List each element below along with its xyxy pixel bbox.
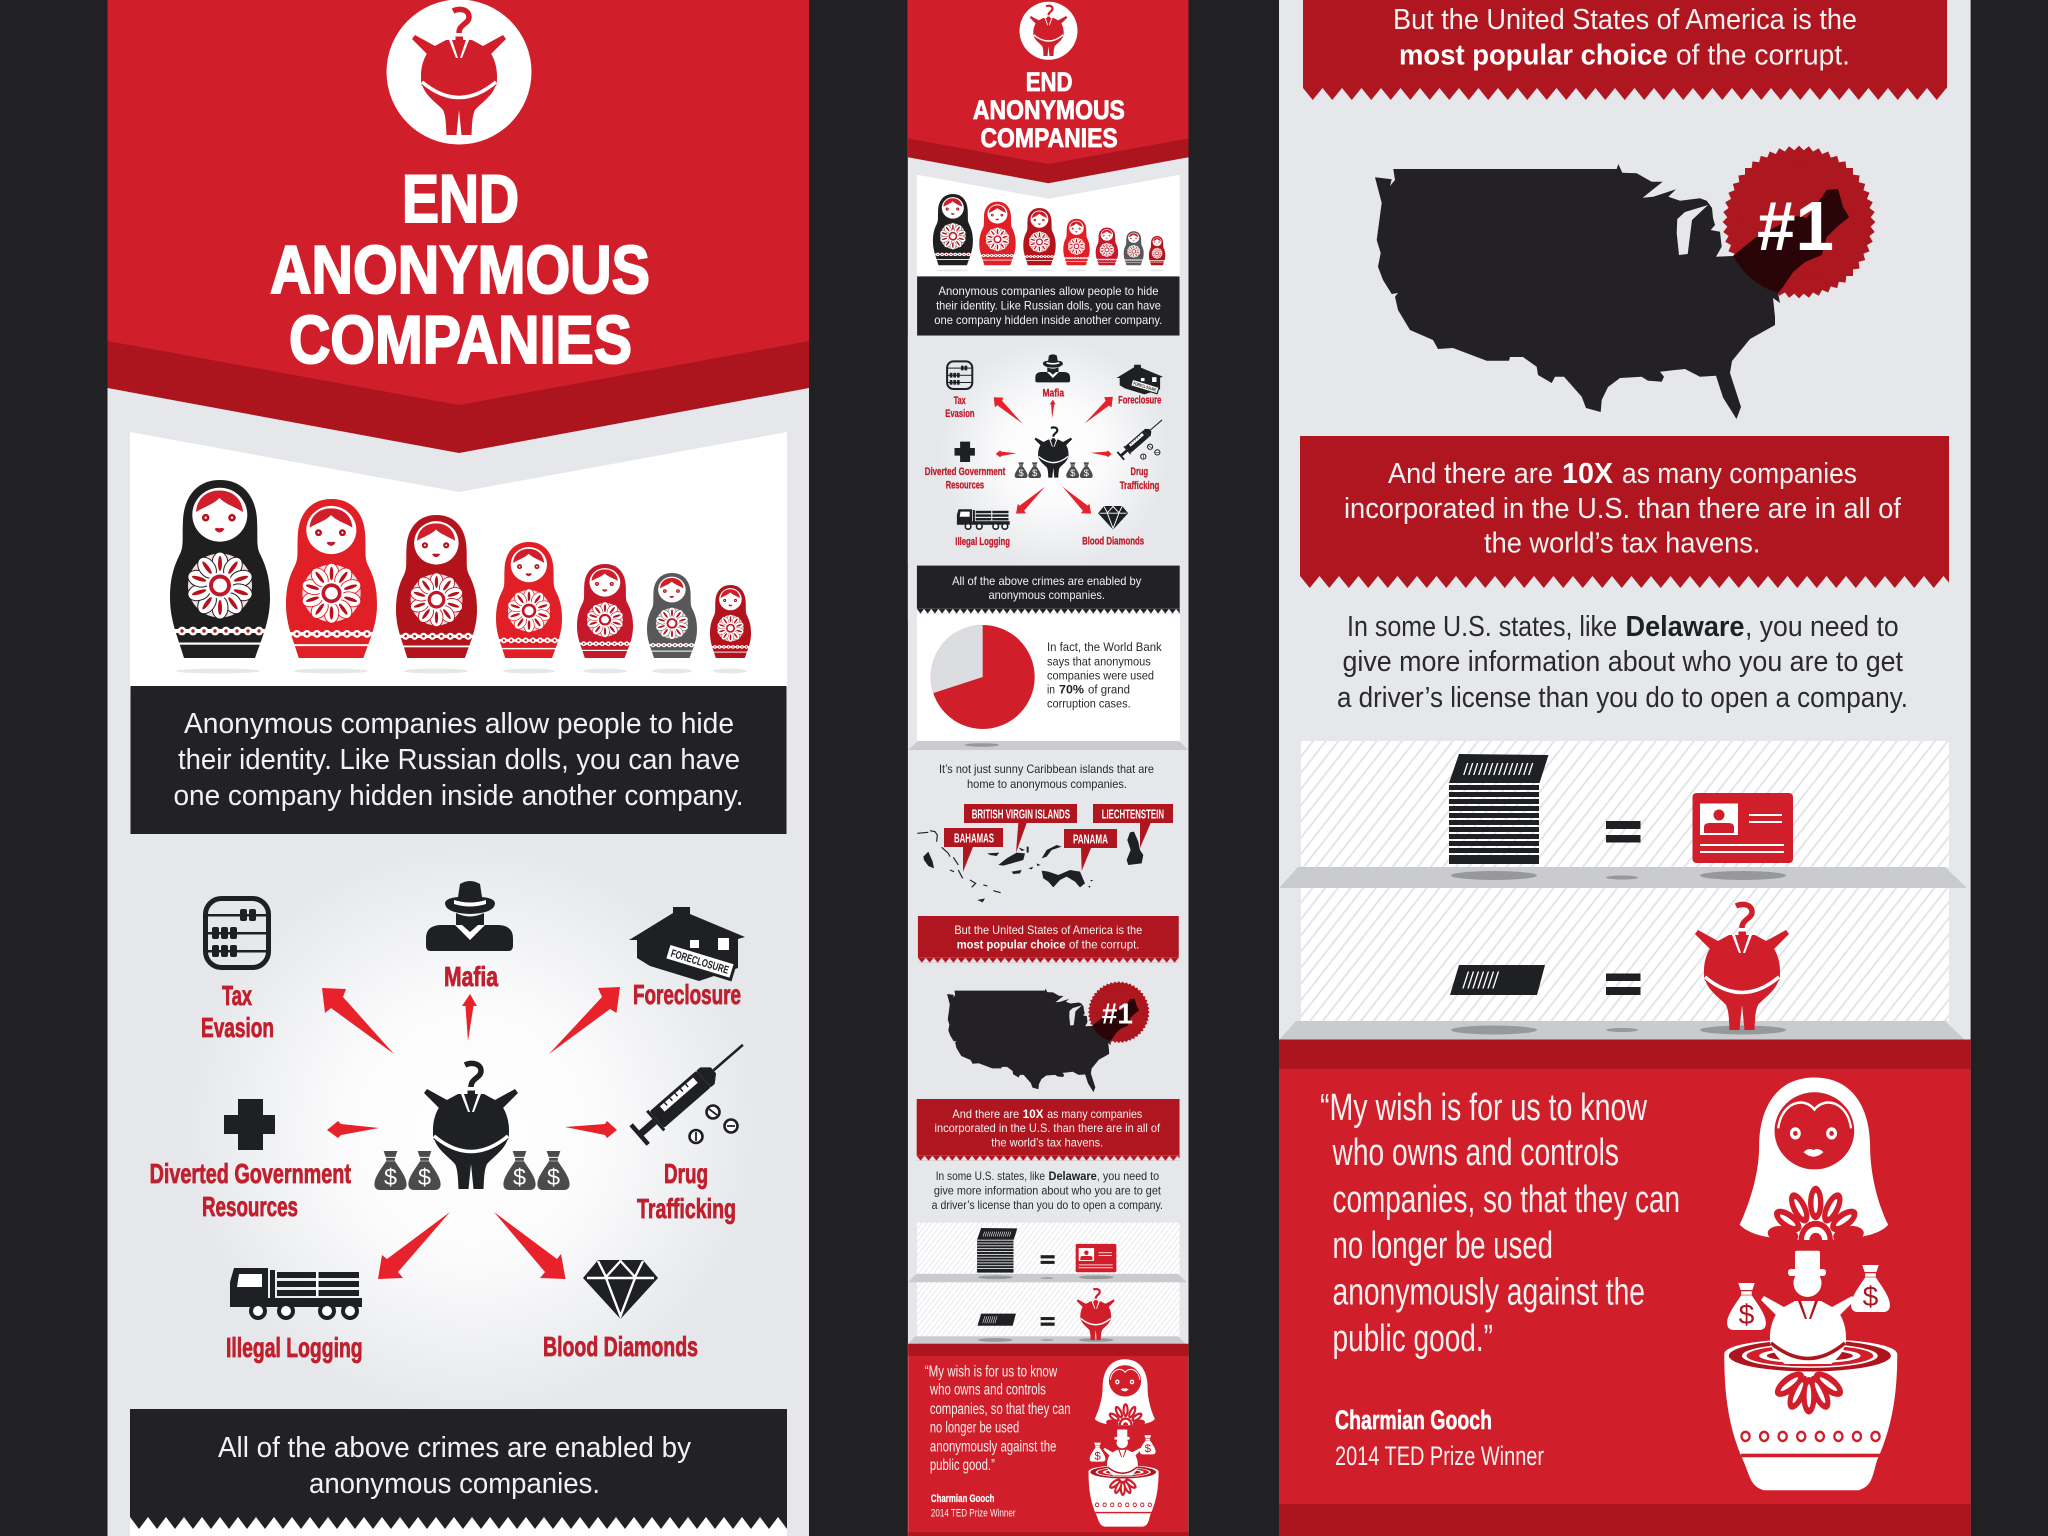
crime labels: Diverted Government bbox=[150, 1158, 351, 1189]
panel: right column background bbox=[1279, 0, 1971, 1536]
quote text: public good.” bbox=[1332, 1318, 1493, 1360]
icon: red anonymous man bbox=[1695, 904, 1789, 1030]
illustration: opened doll revealing man with money bbox=[1724, 1078, 1897, 1490]
crime labels small: Foreclosure bbox=[1118, 395, 1161, 407]
10X text small: 10X bbox=[1023, 1108, 1044, 1121]
text block: Caribbean islands: home to anonymous companies. bbox=[967, 777, 1127, 791]
intro text small bbox=[934, 285, 1162, 327]
flag: Panama bbox=[1064, 829, 1117, 871]
crime labels: Blood Diamonds bbox=[543, 1331, 698, 1362]
crime labels small: Drug bbox=[1131, 466, 1148, 478]
Delaware text small bbox=[932, 1170, 1163, 1212]
badge text: #1 bbox=[1757, 187, 1834, 265]
middle column: map, comparison and quote (small copy) bbox=[908, 916, 1188, 1536]
pie chart 70 percent bbox=[931, 625, 1035, 729]
text block: 10X companies: And there are bbox=[1388, 458, 1553, 490]
text block: 10X companies: incorporated in the U.S. than there are in all of bbox=[1344, 493, 1902, 525]
quote attribution: 2014 TED Prize Winner bbox=[1335, 1441, 1544, 1471]
icon: abacus, tax evasion bbox=[206, 898, 268, 968]
text block: most popular choice bbox=[1393, 4, 1857, 72]
title small: ANONYMOUS bbox=[973, 94, 1125, 125]
quote text small bbox=[925, 1363, 1071, 1474]
quote text: who owns and controls bbox=[1332, 1132, 1619, 1174]
flag: British Virgin Islands: BRITISH VIRGIN ISLANDS bbox=[972, 807, 1070, 821]
text block: Caribbean islands bbox=[939, 762, 1154, 791]
pie caption: says that anonymous bbox=[1047, 654, 1151, 668]
panel: left column (header, dolls, crimes) bbox=[108, 0, 809, 1536]
flag: Liechtenstein: LIECHTENSTEIN bbox=[1102, 807, 1164, 821]
crime labels: Resources bbox=[202, 1191, 298, 1222]
10X text small: as many companies bbox=[1047, 1108, 1142, 1121]
crimes enabled text small bbox=[952, 575, 1141, 602]
text block: crimes enabled bbox=[218, 1432, 691, 1500]
white man in bowl with hat bbox=[1727, 1251, 1890, 1396]
crime labels small: Blood Diamonds bbox=[1082, 535, 1144, 547]
10X text small: the world’s tax havens. bbox=[991, 1136, 1103, 1149]
pie caption: In fact, the World Bank bbox=[1047, 640, 1162, 654]
icon: equals sign bbox=[1606, 821, 1640, 842]
text block: Delaware: a driver’s license than you do to open a company. bbox=[1337, 682, 1908, 714]
quote panel background bbox=[1279, 1040, 1971, 1536]
doll bottom half bbox=[1724, 1339, 1897, 1490]
text block: Delaware: , you need to bbox=[1745, 611, 1899, 643]
location flags bbox=[944, 804, 1173, 872]
crime labels small: Mafia bbox=[1043, 387, 1065, 399]
text block: intro: their identity. Like Russian dolls, you can have bbox=[178, 744, 740, 776]
text block: Delaware: give more information about who you are to get bbox=[1342, 646, 1903, 678]
text block: intro bbox=[174, 708, 744, 812]
US map silhouette bbox=[1375, 164, 1849, 419]
title bbox=[270, 161, 650, 378]
panel: white doll area bbox=[130, 432, 787, 690]
text block: 10X companies: as many companies bbox=[1622, 458, 1857, 490]
crime labels: Drug bbox=[664, 1158, 708, 1189]
text block: intro: Anonymous companies allow people to hide bbox=[184, 708, 734, 740]
quote text small: no longer be used bbox=[930, 1419, 1019, 1436]
quote text small: companies, so that they can bbox=[930, 1401, 1071, 1418]
middle column: header, dolls and crimes (small copy) bbox=[908, 0, 1188, 626]
text block: Caribbean islands: It’s not just sunny Caribbean islands that are bbox=[939, 762, 1154, 776]
icon: syringe with pills bbox=[629, 1035, 751, 1146]
quote text: companies, so that they can bbox=[1332, 1179, 1680, 1221]
black intro box bbox=[130, 686, 786, 834]
starburst badge bbox=[1723, 146, 1875, 298]
crimes enabled text small: All of the above crimes are enabled by bbox=[952, 575, 1141, 588]
most popular text small: of the corrupt. bbox=[1069, 938, 1139, 951]
crime labels small: Resources bbox=[946, 479, 984, 491]
pie caption: 70% bbox=[1059, 683, 1084, 697]
quote attribution: Charmian Gooch bbox=[1335, 1405, 1492, 1435]
flag: Bahamas bbox=[944, 828, 1003, 872]
intro text small: Anonymous companies allow people to hide bbox=[939, 285, 1159, 298]
red banner: 10X bbox=[1300, 436, 1949, 588]
red banner: most popular choice bbox=[1303, 0, 1947, 100]
text block: Delaware bbox=[1337, 611, 1908, 714]
Delaware text small: a driver’s license than you do to open a company. bbox=[932, 1199, 1163, 1212]
flag: British Virgin Islands bbox=[964, 804, 1077, 853]
title: ANONYMOUS bbox=[270, 232, 650, 308]
text block: Delaware: Delaware bbox=[1626, 611, 1744, 643]
crime labels small bbox=[925, 387, 1161, 548]
pie caption bbox=[1047, 640, 1162, 711]
crime labels: Tax bbox=[222, 980, 252, 1011]
icon: mafia man bbox=[426, 881, 513, 951]
panel: middle column background bbox=[908, 0, 1188, 1536]
crime labels small: Diverted Government bbox=[925, 466, 1005, 478]
quote text: anonymously against the bbox=[1332, 1272, 1645, 1314]
logo: anonymous man in white circle bbox=[386, 0, 532, 144]
Delaware text small: In some U.S. states, like bbox=[936, 1170, 1045, 1183]
icon: foreclosed house bbox=[629, 907, 745, 981]
crime labels bbox=[150, 961, 741, 1363]
text block: Delaware: In some U.S. states, like bbox=[1347, 611, 1617, 643]
quote attribution bbox=[1335, 1405, 1544, 1471]
text block: 10X companies bbox=[1344, 458, 1902, 560]
quote text small: “My wish is for us to know bbox=[925, 1363, 1058, 1380]
quote text bbox=[1320, 1087, 1680, 1360]
quote text small: public good.” bbox=[930, 1457, 995, 1474]
text block: 10X companies: 10X bbox=[1562, 458, 1614, 490]
icon: diamond bbox=[583, 1260, 658, 1319]
title small: COMPANIES bbox=[981, 122, 1118, 153]
icon: thin paper stack bbox=[1450, 965, 1545, 995]
icon: logging truck bbox=[230, 1268, 362, 1320]
10X text small: And there are bbox=[952, 1108, 1020, 1121]
most popular text small bbox=[954, 924, 1143, 951]
crime labels: Mafia bbox=[444, 961, 498, 992]
text block: most popular choice: But the United States of America is the bbox=[1393, 4, 1857, 36]
crime labels small: Evasion bbox=[945, 408, 975, 420]
badge text small: #1 bbox=[1102, 999, 1133, 1031]
attribution small: 2014 TED Prize Winner bbox=[931, 1507, 1016, 1519]
title small bbox=[973, 66, 1125, 153]
most popular text small: most popular choice bbox=[957, 938, 1066, 951]
crime labels: Evasion bbox=[201, 1012, 274, 1043]
flag: Bahamas: BAHAMAS bbox=[954, 832, 994, 846]
crimes radial background bbox=[108, 834, 809, 1409]
flag: Panama: PANAMA bbox=[1073, 832, 1108, 846]
icon: equals sign bbox=[1606, 974, 1640, 995]
quote text small: who owns and controls bbox=[929, 1382, 1046, 1399]
intro text small: their identity. Like Russian dolls, you can have bbox=[936, 300, 1161, 313]
text block: most popular choice: most popular choice bbox=[1399, 40, 1668, 72]
panel: right column graphics (map, comparisons, quote) bbox=[1279, 0, 1971, 1536]
crime labels small: Trafficking bbox=[1120, 480, 1159, 492]
text block: crimes enabled: All of the above crimes are enabled by bbox=[218, 1432, 691, 1464]
attribution small: Charmian Gooch bbox=[931, 1493, 994, 1505]
text block: most popular choice: of the corrupt. bbox=[1676, 40, 1850, 72]
icon: medical cross, diverted resources bbox=[224, 1099, 275, 1150]
flag: Liechtenstein bbox=[1093, 804, 1173, 848]
Delaware text small: Delaware bbox=[1049, 1170, 1097, 1183]
text block: 10X companies: the world’s tax havens. bbox=[1484, 528, 1760, 560]
text block: crimes enabled: anonymous companies. bbox=[309, 1468, 600, 1500]
island silhouettes bbox=[917, 831, 1143, 902]
quote text: no longer be used bbox=[1332, 1225, 1553, 1267]
comparison panel: single sheet equals anonymous company bbox=[1279, 888, 1965, 1040]
crime labels small: Tax bbox=[954, 395, 966, 407]
pie caption: corruption cases. bbox=[1047, 697, 1131, 711]
title: COMPANIES bbox=[289, 302, 632, 378]
pie caption: in bbox=[1047, 683, 1055, 697]
10X text small bbox=[935, 1108, 1161, 1149]
icon: ID card bbox=[1692, 793, 1793, 863]
title small: END bbox=[1026, 66, 1073, 97]
title: END bbox=[402, 161, 519, 237]
doll top half bbox=[1740, 1078, 1888, 1259]
10X text small: incorporated in the U.S. than there are in all of bbox=[935, 1122, 1161, 1135]
crime labels: Illegal Logging bbox=[226, 1332, 363, 1363]
central anonymous man with money bags bbox=[374, 1063, 570, 1190]
black crimes-summary bar bbox=[130, 1409, 787, 1536]
Delaware text small: give more information about who you are to get bbox=[934, 1184, 1162, 1197]
comparison panel: stack of paper equals ID card bbox=[1279, 741, 1967, 888]
pie caption: companies were used bbox=[1047, 669, 1154, 683]
icon: foreclosed house: FORECLOSURE bbox=[669, 948, 730, 977]
quote text small: anonymously against the bbox=[930, 1438, 1056, 1455]
crimes enabled text small: anonymous companies. bbox=[989, 589, 1105, 602]
icon: tall paper stack bbox=[1449, 754, 1548, 864]
russian dolls row bbox=[170, 480, 751, 674]
arrows radiating from man bbox=[322, 987, 620, 1279]
crime labels: Trafficking bbox=[637, 1193, 736, 1224]
quote text: “My wish is for us to know bbox=[1320, 1087, 1647, 1129]
Delaware text small: , you need to bbox=[1097, 1170, 1160, 1183]
attribution small bbox=[931, 1493, 1016, 1519]
most popular text small: But the United States of America is the bbox=[954, 924, 1143, 937]
pie caption: of grand bbox=[1088, 683, 1130, 697]
crime labels small: Illegal Logging bbox=[955, 536, 1010, 548]
middle column: pie chart panel bbox=[908, 614, 1188, 750]
intro text small: one company hidden inside another company. bbox=[934, 314, 1162, 327]
header ribbon bbox=[108, 0, 809, 453]
text block: intro: one company hidden inside another company. bbox=[174, 780, 744, 812]
crime labels: Foreclosure bbox=[633, 979, 741, 1010]
